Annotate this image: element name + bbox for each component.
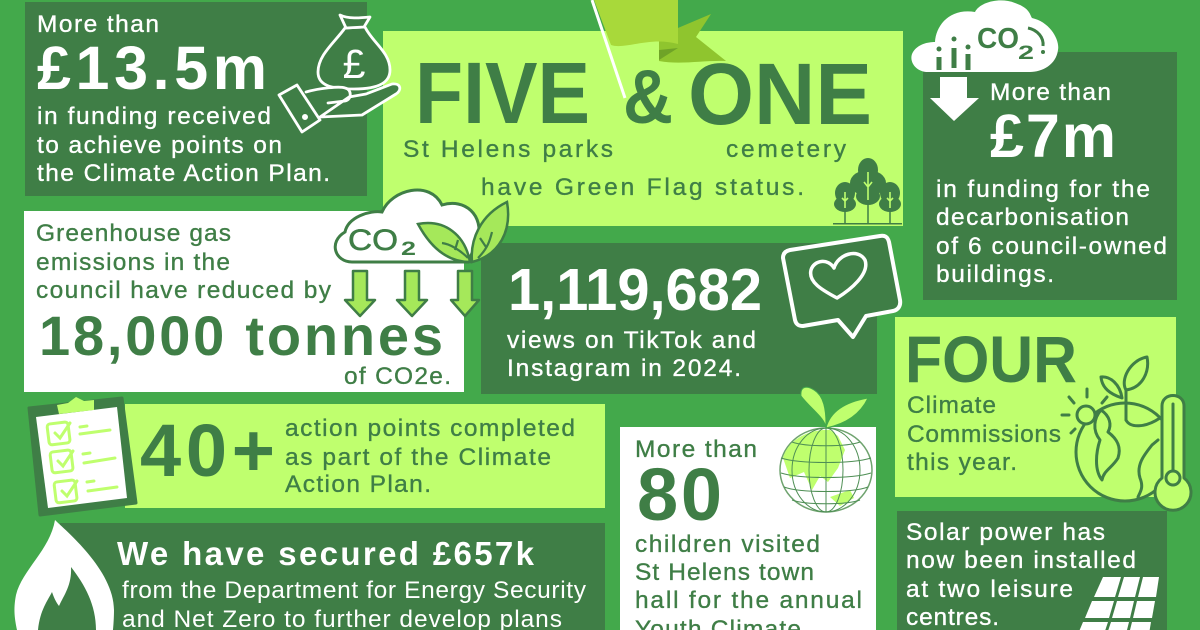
text: solar description: [906, 519, 1136, 630]
heading: ampersand: &: [623, 55, 673, 140]
stat: £7m: £7m: [990, 102, 1116, 170]
icon: flame: [14, 520, 114, 630]
text: decarbonisation description: decarbonisation: [936, 204, 1129, 231]
text: funding description: to achieve points on: [37, 132, 282, 159]
text: solar description: now been installed: [906, 547, 1136, 574]
text: children description: hall for the annual: [635, 587, 862, 614]
text: views description: Instagram in 2024.: [507, 355, 741, 382]
text: decarbonisation description: [936, 176, 1167, 288]
text: more than: More than: [990, 79, 1111, 106]
icon: white down arrow: [930, 77, 979, 121]
text: climate commissions description: Commissions: [907, 421, 1061, 448]
panel: five and one green flag: [383, 31, 903, 226]
text: more than: More than: [37, 11, 159, 38]
text: parks and cemetery: cemetery: [726, 136, 847, 163]
panel: four climate commissions: [895, 317, 1176, 497]
icon: money bag and hand: [279, 15, 400, 132]
heading: five: FIVE: [415, 45, 590, 142]
text: of CO2e: of CO2e.: [344, 363, 451, 390]
text: climate commissions description: Climate: [907, 392, 996, 419]
stat: 18,000 tonnes: 18,000 tonnes: [39, 304, 443, 367]
text: greenhouse gas description: council have reduced by: [36, 277, 332, 304]
icon: earth with thermometer, sun and plant: [1062, 357, 1191, 510]
icon: trees: [833, 158, 902, 224]
text: funding description: [37, 103, 330, 187]
text: decarbonisation description: in funding for the: [936, 176, 1150, 203]
heading: one: ONE: [688, 46, 872, 143]
text: parks and cemetery: have Green Flag status.: [481, 174, 804, 201]
text: solar description: Solar power has: [906, 519, 1105, 546]
icon: CO2 cloud with leaves and arrows: [335, 190, 508, 316]
stat: 40+: 40+: [140, 409, 275, 492]
panel: £13.5m funding: [25, 2, 367, 196]
icon: white CO2 cloud: 2: [1018, 43, 1034, 64]
text: climate commissions description: this year.: [907, 449, 1017, 476]
icon: green flag: [592, 0, 726, 98]
heading: four: FOUR: [905, 322, 1077, 396]
text: children description: children visited: [635, 531, 820, 558]
text: decarbonisation description: buildings.: [936, 261, 1054, 288]
icon: clipboard checklist: [29, 397, 136, 515]
heading: we have secured: We have secured £657k: [117, 535, 535, 572]
text: funding description: in funding received: [37, 103, 271, 130]
text: more than: More than: [635, 436, 757, 463]
text: children description: [635, 531, 862, 630]
text: parks and cemetery: St Helens parks: [403, 136, 613, 163]
panel: solar power: [897, 511, 1167, 630]
text: views description: [507, 327, 756, 382]
text: parks and cemetery: [403, 136, 847, 201]
text: action points description: Action Plan.: [285, 471, 431, 498]
text: action points description: action points completed: [285, 415, 575, 442]
panel: £7m decarbonisation: [923, 52, 1177, 300]
panel: 40+ action points: [125, 404, 605, 508]
icon: money bag and hand: £: [343, 41, 366, 87]
panel: £657k secured: [60, 523, 605, 630]
icon: speech bubble with heart: [783, 236, 900, 337]
icon: globe with sprout: [780, 387, 872, 512]
text: decarbonisation description: of 6 council-owned: [936, 233, 1167, 260]
text: climate commissions description: [907, 392, 1061, 476]
panel: children at Youth Climate event: [620, 427, 876, 630]
icon: solar panel: [1078, 577, 1159, 630]
icon: CO2 cloud with leaves and arrows: CO: [348, 224, 398, 257]
text: greenhouse gas description: emissions in the: [36, 249, 230, 276]
panel: greenhouse gas reduction: [24, 211, 464, 392]
text: department description: [122, 577, 587, 630]
text: greenhouse gas description: [36, 220, 332, 304]
icon: CO2 cloud with leaves and arrows: 2: [401, 239, 416, 260]
stat: 80: 80: [637, 453, 722, 536]
text: funding description: the Climate Action Plan.: [37, 160, 330, 187]
text: department description: from the Department for Energy Security: [122, 577, 587, 604]
text: solar description: at two leisure: [906, 576, 1073, 603]
panel: social media views: [481, 243, 877, 394]
text: action points description: as part of the Climate: [285, 444, 551, 471]
text: action points description: [285, 415, 575, 498]
text: greenhouse gas description: Greenhouse gas: [36, 220, 231, 247]
text: views description: views on TikTok and: [507, 327, 756, 354]
stat: views: 1,119,682: [508, 257, 762, 323]
text: children description: St Helens town: [635, 559, 814, 586]
icon: white CO2 cloud: CO: [977, 23, 1019, 55]
stat: £13.5m: £13.5m: [37, 34, 267, 102]
icon: white CO2 cloud: [911, 0, 1058, 72]
